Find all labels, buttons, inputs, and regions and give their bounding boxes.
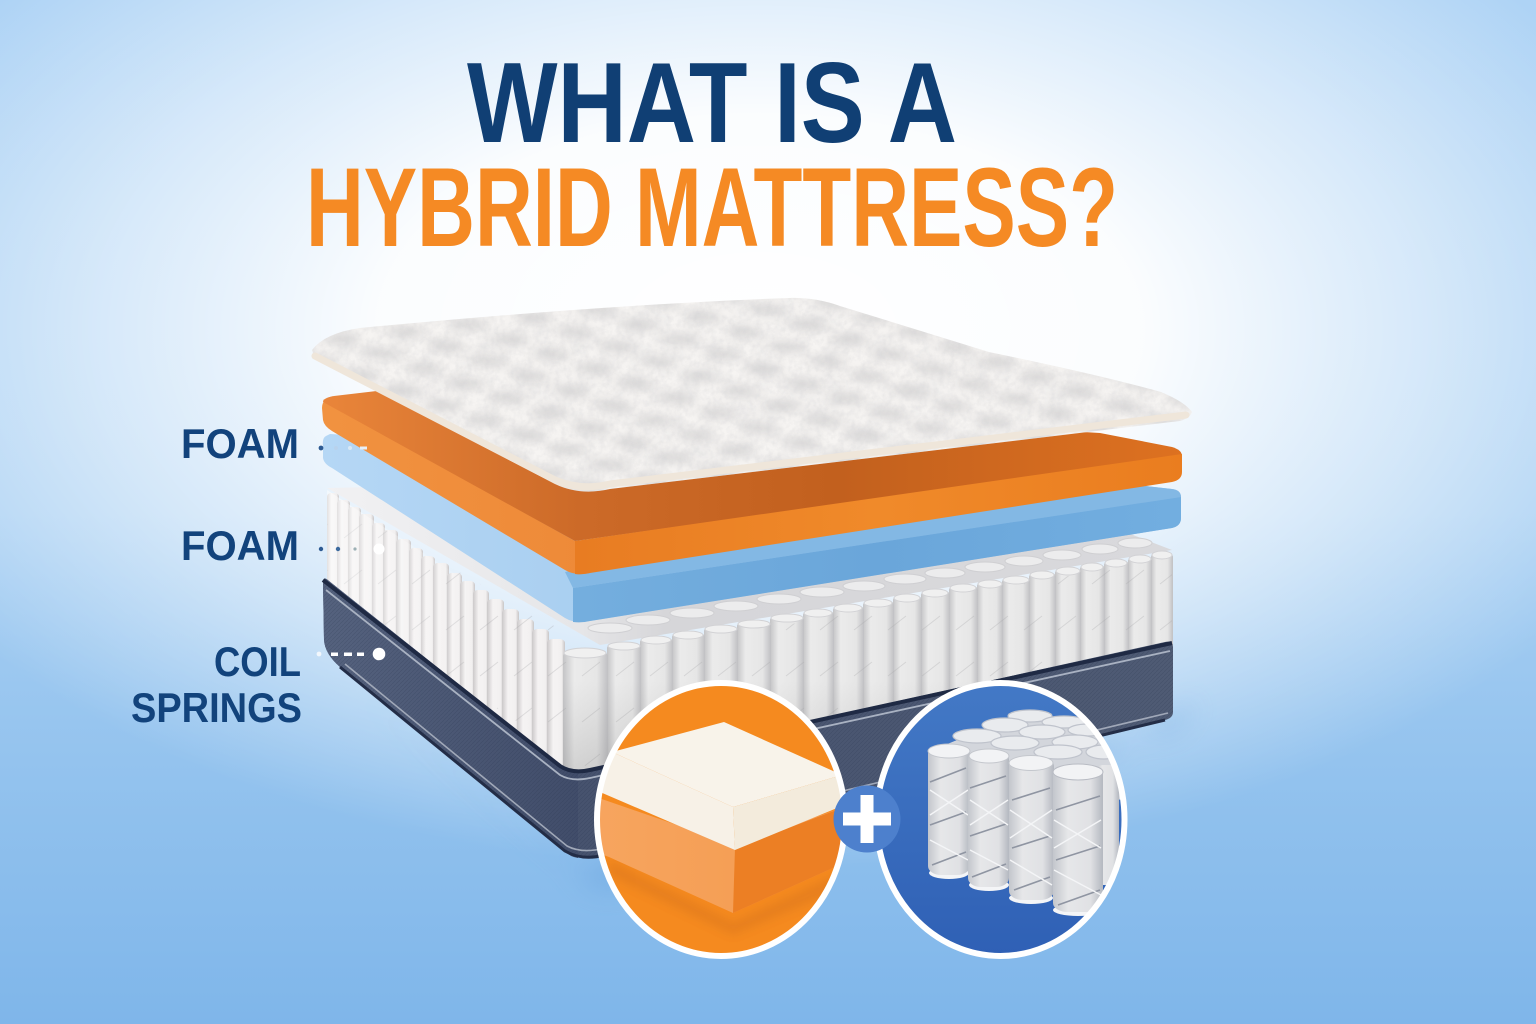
- orange foam block: [600, 799, 834, 913]
- layer labels: [131, 420, 385, 731]
- label: foam top: FOAM: [181, 420, 299, 467]
- label: coil springs: [131, 638, 302, 731]
- coil spring layer: [327, 480, 1173, 785]
- white foam block: [600, 722, 842, 850]
- plus badge: [834, 786, 900, 852]
- pad border: [315, 356, 1186, 487]
- leader: foam top: [319, 446, 367, 450]
- inset: foam: [590, 683, 850, 956]
- plus sign: [843, 795, 891, 843]
- orange foam layer: [322, 390, 1182, 574]
- far right coil: [1100, 765, 1119, 885]
- coil shading: [327, 497, 1172, 780]
- denim base: [323, 579, 1173, 858]
- inset: coils: [876, 683, 1124, 956]
- back coil rows: [945, 710, 1122, 800]
- blue foam layer: [323, 434, 1181, 622]
- label: coil springs: COIL: [214, 638, 301, 685]
- front coil 1: [928, 744, 970, 879]
- title line 2: HYBRID MATTRESS?: [306, 145, 1118, 270]
- title: [306, 40, 1118, 270]
- front coil 4: [1053, 764, 1103, 916]
- title line 1: WHAT IS A: [467, 40, 957, 167]
- foam shadow: [610, 864, 829, 932]
- leader: coil springs: [317, 648, 385, 660]
- front coil 3: [1009, 756, 1054, 904]
- leader: foam lower: [319, 544, 384, 554]
- front coil 2: [968, 749, 1009, 891]
- coils: right face: [607, 552, 1173, 774]
- mattress cutaway illustration: [300, 290, 1200, 858]
- blue top edge: [565, 470, 1181, 588]
- ground shadow: [340, 680, 1200, 890]
- blue front face: [573, 497, 1181, 622]
- label: foam lower: FOAM: [181, 522, 299, 569]
- label: coil springs: SPRINGS: [131, 684, 302, 731]
- corner coil top: [564, 648, 606, 658]
- quilted top layer: [300, 290, 1200, 500]
- coil tops: right face: [608, 551, 1172, 650]
- coils: left face: [327, 493, 608, 785]
